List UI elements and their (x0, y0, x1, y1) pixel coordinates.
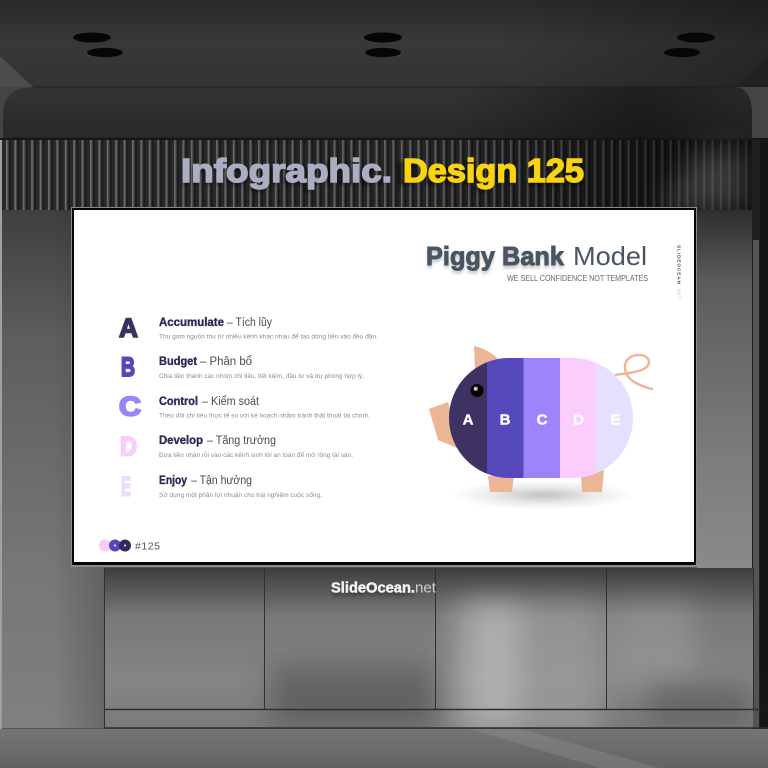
pig stripe letters: E (610, 412, 621, 428)
step B (121, 352, 364, 382)
slide title: Piggy Bank (426, 244, 565, 274)
step E (121, 472, 322, 502)
main heading: Design 125 (403, 152, 584, 189)
step E: – Tận hưởng (191, 475, 252, 487)
step D (120, 432, 353, 462)
step D: Đưa tiền nhàn rỗi vào các kênh sinh lời an toàn để mở rộng tài sản. (159, 450, 353, 459)
step C (119, 392, 370, 422)
step B: Chia tiền thành các nhóm chi tiêu, tiết kiệm, đầu tư và dự phòng hợp lý. (159, 371, 364, 380)
step C: C (119, 392, 141, 422)
pig stripe letters: B (500, 412, 511, 428)
brand watermark: SlideOcean. (331, 580, 415, 596)
cabinet (104, 568, 768, 740)
step D: Develop (159, 435, 203, 447)
main heading: Infographic. Design 125 (181, 155, 585, 192)
footer circles (99, 540, 131, 552)
step A (119, 313, 378, 343)
slide title (426, 241, 647, 274)
step E: Enjoy (159, 475, 188, 487)
slide title: Piggy Bank (426, 241, 565, 271)
pig stripe letters: D (573, 412, 584, 428)
recessed ceiling lights (73, 32, 715, 57)
brand watermark: net (415, 580, 437, 596)
step E: Sử dụng một phần lợi nhuận cho trải nghiệm cuộc sống. (159, 490, 322, 499)
pig tail (615, 355, 652, 389)
vertical brand label (676, 245, 682, 299)
footer design number (99, 540, 160, 552)
step A: A (119, 313, 138, 343)
vertical brand label: SLIDEOCEAN (676, 245, 682, 285)
step E: E (121, 472, 131, 502)
pig eye (470, 384, 484, 397)
step B: – Phân bổ (200, 356, 252, 368)
pig stripe letters: C (537, 412, 548, 428)
slatted wall panel (0, 140, 768, 210)
vertical brand label: .NET (676, 287, 682, 299)
step B: B (121, 352, 135, 382)
ground shadow (451, 480, 635, 510)
pig legs (488, 470, 604, 492)
floor (0, 729, 768, 768)
pig stripe letters: A (463, 412, 474, 428)
slide subtitle: WE SELL CONFIDENCE NOT TEMPLATES (507, 273, 648, 283)
list of five steps (119, 313, 378, 502)
pig body stripes (449, 358, 633, 478)
main heading: Infographic. (181, 152, 392, 189)
step D: D (120, 432, 137, 462)
pig ear (474, 346, 499, 369)
pig stripe letters (463, 412, 621, 428)
pig snout (429, 402, 462, 450)
brand watermark (331, 580, 437, 600)
step B: Budget (159, 356, 197, 368)
step A: Accumulate (159, 317, 224, 329)
ceiling (0, 0, 768, 100)
step A: Thu gom nguồn thu từ nhiều kênh khác nhau để tạo dòng tiền vào đều đặn. (159, 332, 378, 340)
presentation screen (71, 207, 697, 567)
step D: – Tăng trưởng (207, 435, 276, 447)
footer number: #125 (135, 540, 160, 552)
step C: Theo dõi chi tiêu thực tế so với kế hoạch nhằm tránh thất thoát tài chính. (159, 410, 370, 420)
right wall and pillar (697, 140, 768, 740)
slide title: Model (573, 241, 647, 271)
ceiling trim band (0, 86, 768, 140)
step A: – Tích lũy (227, 317, 272, 329)
step C: – Kiểm soát (202, 396, 260, 408)
brand watermark: SlideOcean. (331, 583, 415, 600)
step C: Control (159, 396, 198, 408)
piggy bank illustration (429, 346, 652, 510)
left wall (0, 140, 104, 730)
